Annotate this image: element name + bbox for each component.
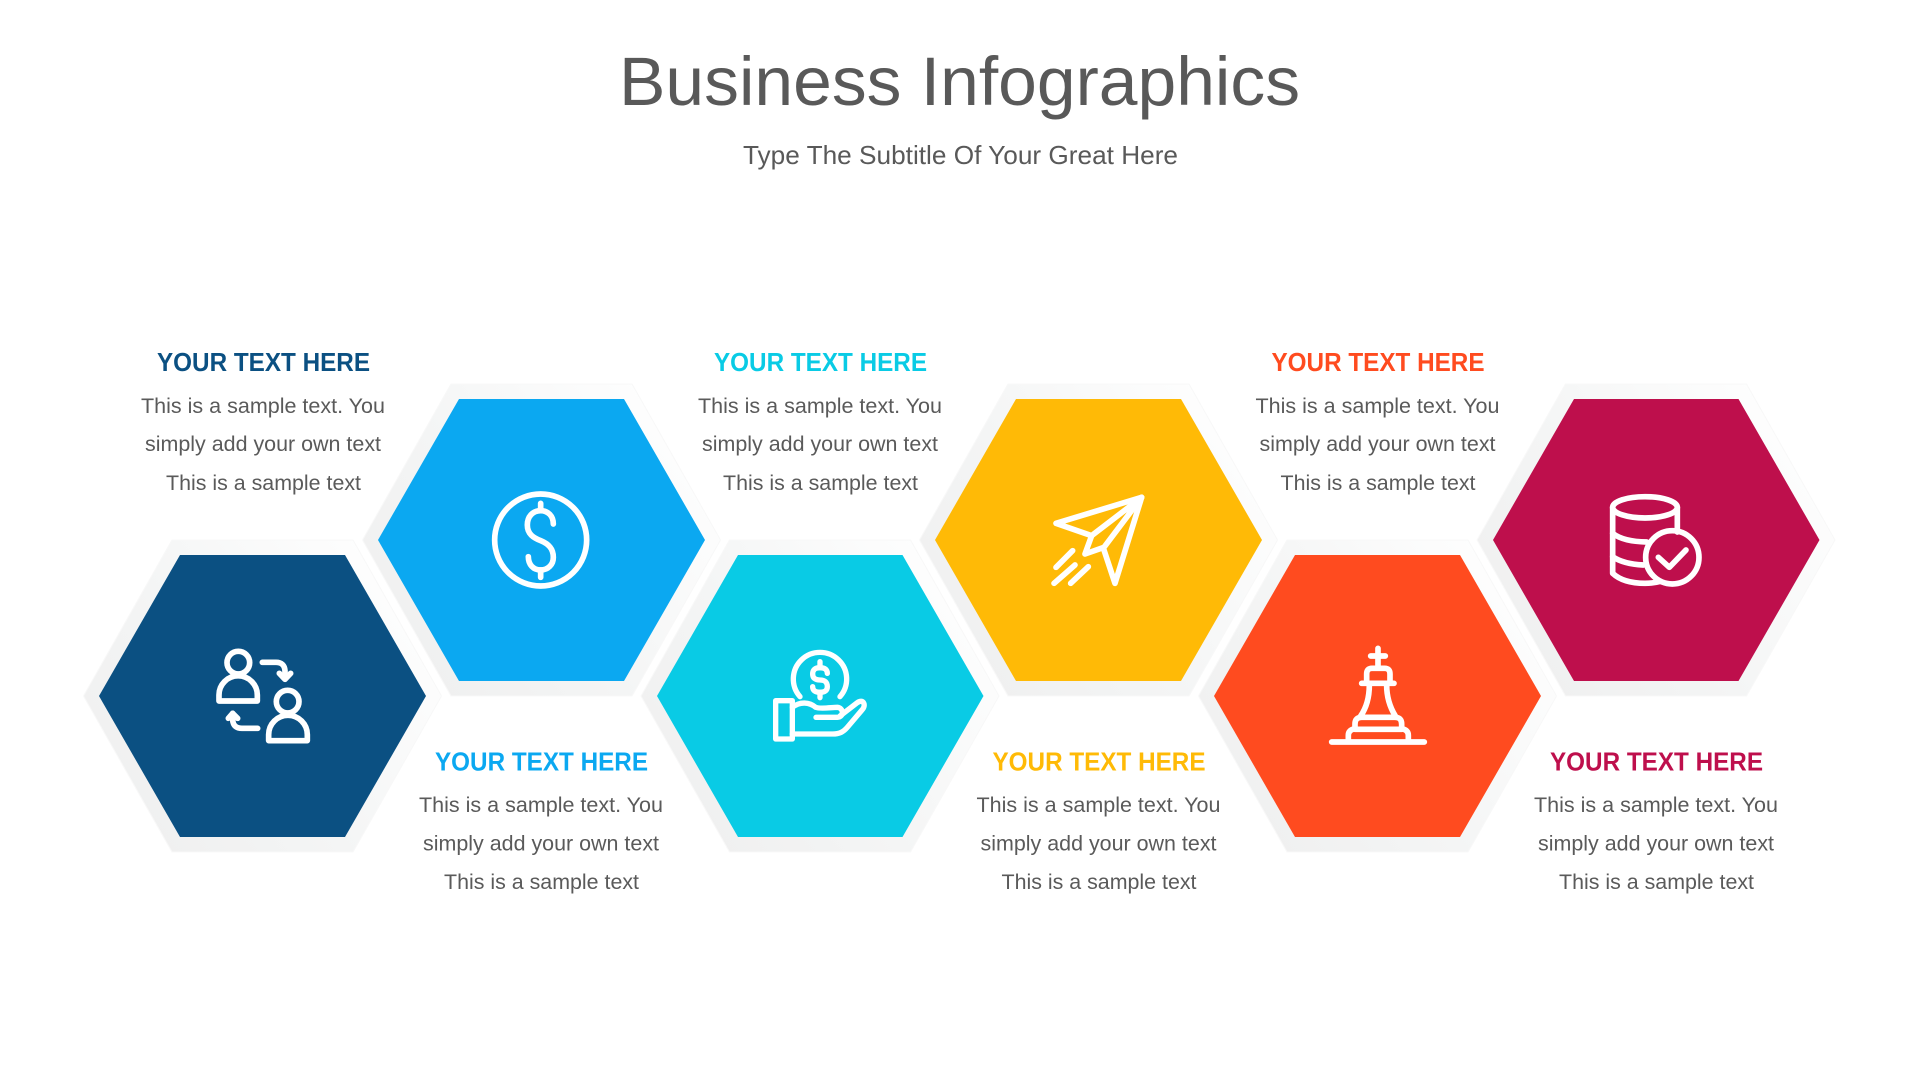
subtitle: Type The Subtitle Of Your Great Here <box>743 140 1178 170</box>
icon: coin in hand <box>776 652 864 739</box>
hexagon 2 <box>378 399 705 681</box>
description 3: This is a sample text. You <box>698 395 942 418</box>
panel: step 3 teal <box>641 347 999 852</box>
hexagon backing 2 <box>362 384 720 696</box>
heading 6: YOUR TEXT HERE <box>1550 746 1763 776</box>
description 5: simply add your own text <box>1260 433 1496 456</box>
description 6 <box>1534 794 1778 894</box>
description 4 <box>976 794 1220 894</box>
heading 1: YOUR TEXT HERE <box>157 347 370 377</box>
description 3 <box>698 395 942 495</box>
icon: chess king <box>1332 648 1424 742</box>
description 3: This is a sample text <box>723 472 918 495</box>
description 2: This is a sample text. You <box>419 794 663 817</box>
heading 2: YOUR TEXT HERE <box>435 746 648 776</box>
icon: dollar coin <box>495 494 587 586</box>
title: Business Infographics <box>619 43 1300 120</box>
description 1: This is a sample text. You <box>141 395 385 418</box>
hexagon 5 <box>1214 555 1541 837</box>
description 4: This is a sample text. You <box>976 794 1220 817</box>
hexagon 1 <box>99 555 426 837</box>
hexagon backing 3 <box>641 540 999 852</box>
heading 5: YOUR TEXT HERE <box>1272 347 1484 377</box>
description 1 <box>141 395 385 495</box>
description 6: This is a sample text <box>1559 871 1754 894</box>
description 4: simply add your own text <box>980 832 1217 856</box>
description 2: simply add your own text <box>423 832 659 856</box>
description 5 <box>1256 395 1500 495</box>
description 6: This is a sample text. You <box>1534 794 1778 817</box>
description 4: This is a sample text <box>1002 871 1197 894</box>
panel: step 5 orange <box>1198 347 1556 852</box>
description 1: This is a sample text <box>166 472 361 495</box>
panel: step 6 crimson <box>1477 384 1835 894</box>
hexagon backing 4 <box>920 384 1278 696</box>
hexagon backing 6 <box>1477 384 1835 696</box>
hexagon backing 1 <box>84 540 442 852</box>
heading 3: YOUR TEXT HERE <box>714 347 927 377</box>
hexagon 3 <box>657 555 984 837</box>
panel: step 2 blue <box>362 384 720 894</box>
panel: step 1 navy <box>84 347 442 852</box>
description 6: simply add your own text <box>1538 832 1774 856</box>
description 3: simply add your own text <box>702 433 938 456</box>
description 5: This is a sample text <box>1280 472 1476 495</box>
hexagon backing 5 <box>1198 540 1556 852</box>
hexagon 4 <box>935 399 1262 681</box>
panel: step 4 yellow <box>920 384 1278 894</box>
description 2 <box>419 794 663 894</box>
description 5: This is a sample text. You <box>1256 395 1500 418</box>
heading 4: YOUR TEXT HERE <box>992 746 1206 776</box>
icon: people exchange <box>219 651 307 741</box>
description 2: This is a sample text <box>444 871 639 894</box>
hexagon 6 <box>1493 399 1820 681</box>
description 1: simply add your own text <box>145 433 381 456</box>
icon: database check <box>1613 497 1699 584</box>
icon: paper plane <box>1054 497 1142 583</box>
